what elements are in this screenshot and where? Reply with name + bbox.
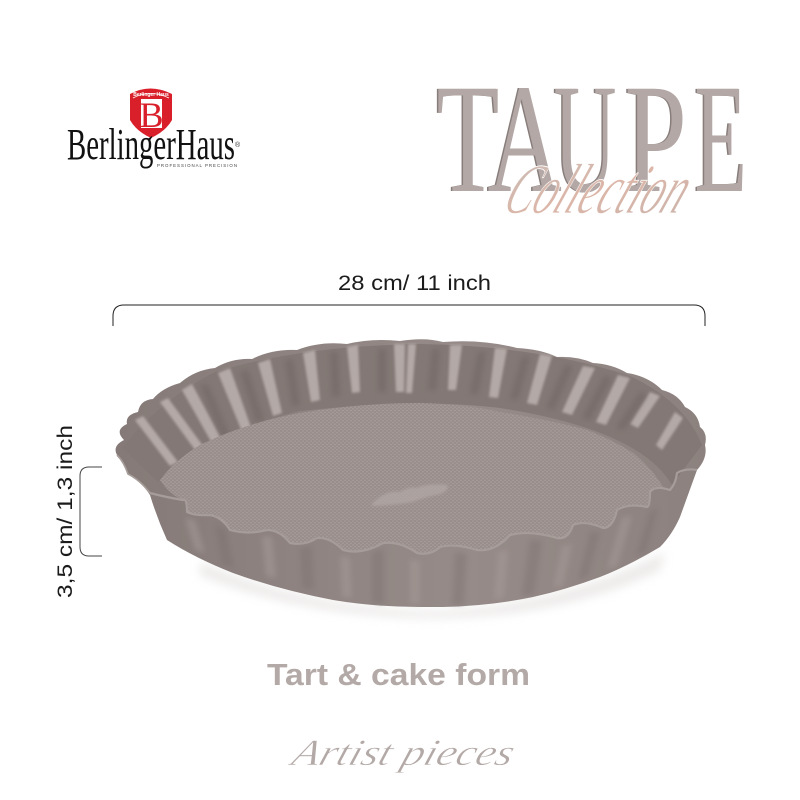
heading shadow bbox=[435, 52, 745, 226]
tagline: PROFESSIONAL PRECISION bbox=[157, 163, 237, 168]
dimension: width label: 28 cm/ 11 inch bbox=[338, 272, 491, 295]
product: tart pan bbox=[116, 339, 706, 618]
heading letters: A bbox=[488, 52, 562, 225]
heading letters: P bbox=[624, 53, 687, 225]
product name: Tart & cake form bbox=[267, 657, 530, 692]
heading shadow: T bbox=[435, 52, 498, 225]
icon: red shield bbox=[130, 88, 172, 138]
front rim lip bbox=[150, 469, 697, 554]
dimension: height bracket bbox=[80, 467, 102, 556]
heading letters: T bbox=[436, 52, 499, 225]
heading shadow: A bbox=[486, 52, 560, 225]
trademark: ® bbox=[235, 141, 241, 149]
heading shadow: U bbox=[552, 53, 615, 226]
heading shadow: P bbox=[623, 53, 685, 225]
wordmark: BerlingerHaus bbox=[67, 120, 235, 169]
dimension: width bracket bbox=[113, 305, 705, 326]
pan shadow bbox=[200, 552, 665, 618]
title: TAUPE Collection bbox=[435, 52, 747, 229]
signature: Artist pieces: Artist pieces bbox=[285, 732, 521, 773]
icon: red shield: Berlinger Haus bbox=[133, 92, 169, 98]
floor embossed logo bbox=[372, 484, 448, 506]
logo: BerlingerHaus bbox=[67, 88, 241, 169]
wall flute dark creases bbox=[200, 349, 647, 438]
script: Collection: Collection bbox=[493, 150, 706, 229]
heading shadow: E bbox=[693, 53, 745, 226]
pan outer body bbox=[116, 339, 706, 607]
front wall flute shading bbox=[215, 508, 658, 605]
heading letters: E bbox=[694, 53, 747, 226]
dimension: height label: 3,5 cm/ 1,3 inch bbox=[54, 425, 77, 598]
icon: red shield: B bbox=[139, 95, 164, 135]
front wall flute highlights bbox=[185, 516, 632, 604]
left rim lip bbox=[117, 455, 150, 493]
heading letters bbox=[436, 52, 747, 226]
wall flute highlights bbox=[135, 344, 683, 466]
heading letters: U bbox=[554, 53, 617, 226]
inner fluted wall shading bbox=[122, 344, 702, 485]
textured pan floor bbox=[160, 403, 665, 554]
